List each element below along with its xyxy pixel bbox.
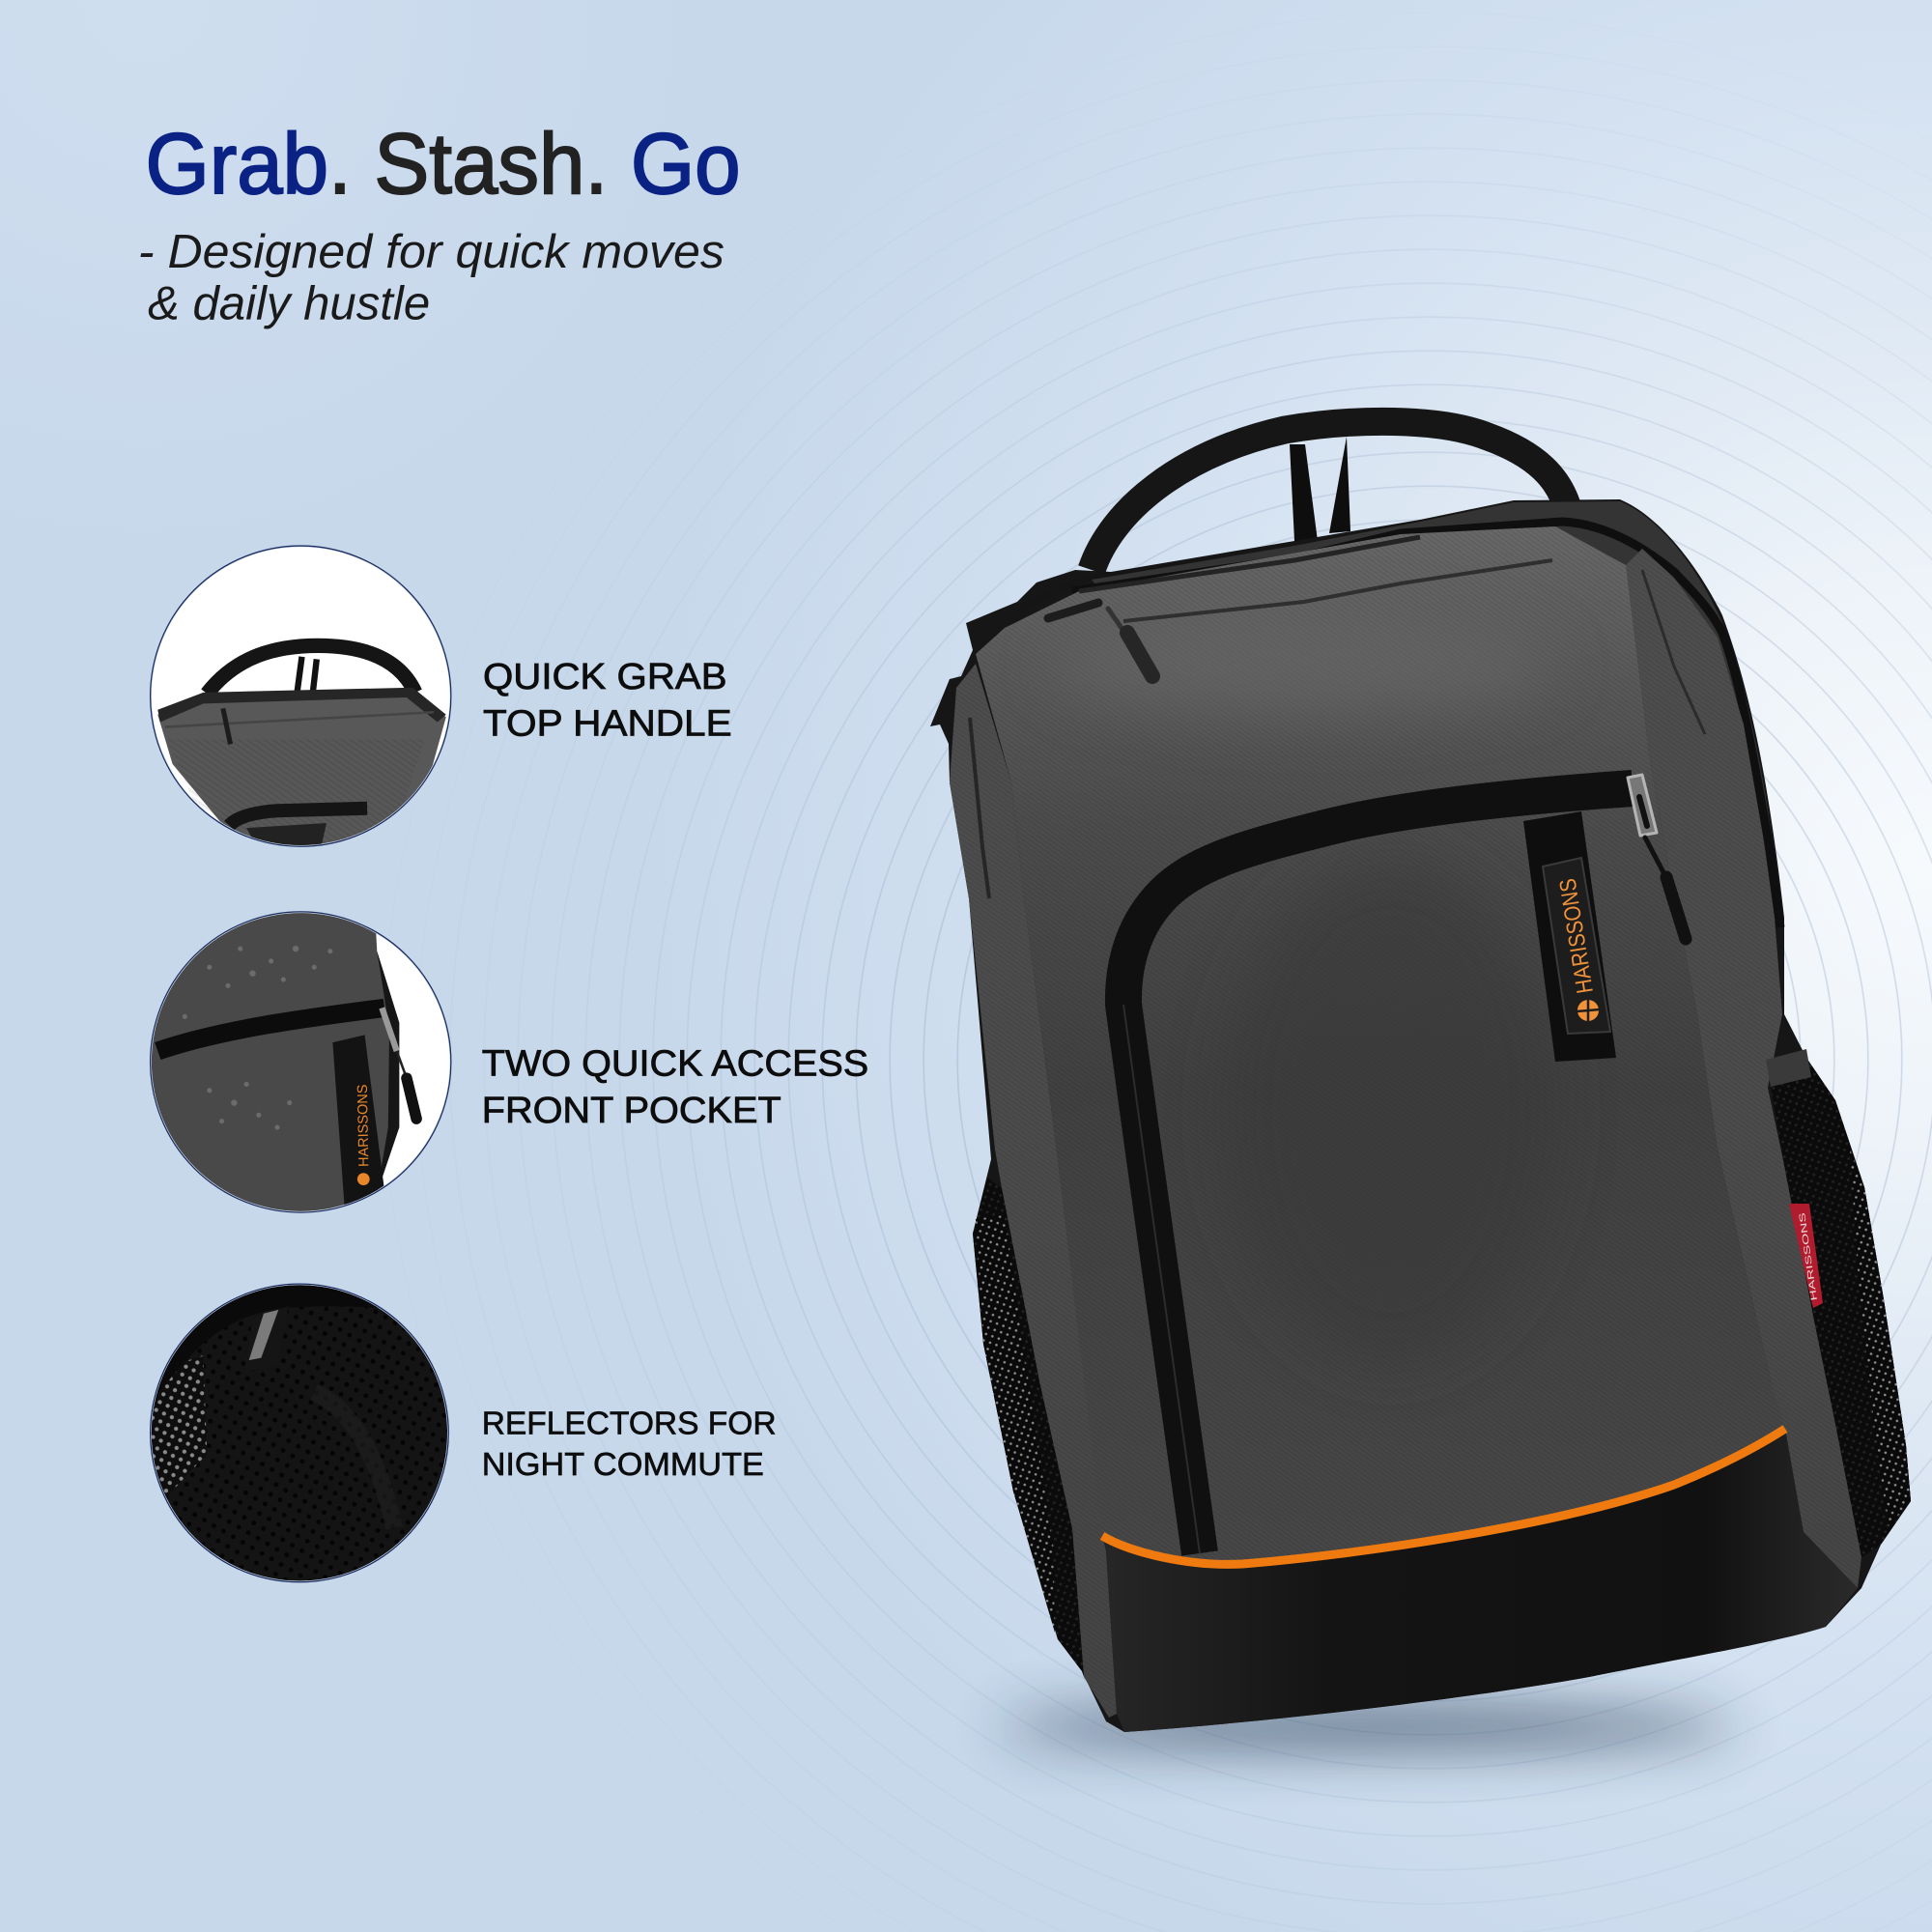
right side panel: [1626, 549, 1861, 1588]
feature: reflectors for night commute: [148, 1282, 777, 1589]
background with concentric rings: [618, 0, 1932, 1839]
feature: quick grab top handle: [148, 542, 732, 850]
circle photo: reflectors: [148, 1282, 456, 1589]
infographic artwork: [140, 129, 1911, 1789]
red side tag: [1789, 1204, 1823, 1308]
zipper band: [1072, 522, 1780, 927]
fabric shading: [1053, 618, 1555, 1362]
label: two quick access front pocket: [482, 1043, 868, 1130]
label: quick grab top handle: TOP HANDLE: [483, 702, 732, 743]
top handle: [1092, 421, 1569, 570]
brand tab: HARISSONS: [1554, 877, 1599, 995]
left mesh pocket: [973, 1178, 1084, 1677]
title: Grab. Stash. Go: [146, 115, 741, 212]
top seam: [1123, 560, 1552, 621]
orange piping: [1102, 1429, 1785, 1564]
label: reflectors for night commute: NIGHT COMMUTE: [482, 1447, 764, 1483]
front panel: [976, 526, 1785, 1564]
label: reflectors for night commute: [482, 1406, 777, 1483]
pocket zip: [1123, 788, 1633, 1553]
base: [1102, 1429, 1858, 1732]
subtitle: - Designed for quick moves: [138, 226, 724, 278]
circle photo: front pocket: [148, 906, 456, 1220]
red side tag: HARISSONS: [1797, 1212, 1819, 1301]
label: quick grab top handle: [483, 656, 732, 743]
ground shadow: [998, 1708, 1737, 1747]
backpack: [930, 421, 1911, 1732]
left side panel: [950, 664, 1117, 1718]
subtitle: [138, 226, 724, 329]
circle photo: top handle: [148, 542, 456, 850]
bag back layer: [930, 499, 1911, 1732]
pocket zipper pull: [1628, 775, 1686, 939]
label: two quick access front pocket: FRONT POCKET: [482, 1090, 781, 1130]
label: quick grab top handle: QUICK GRAB: [483, 656, 727, 696]
brand tab: [1523, 811, 1616, 1062]
subtitle: & daily hustle: [148, 277, 430, 329]
label: reflectors for night commute: REFLECTORS FOR: [482, 1406, 777, 1442]
top zip pullers: [1048, 603, 1152, 676]
feature: two quick access front pocket: [148, 906, 868, 1220]
brand label: HARISSONS: [355, 1084, 372, 1167]
right mesh pocket: [1766, 1049, 1911, 1557]
label: two quick access front pocket: TWO QUICK ACCESS: [482, 1043, 868, 1084]
top rim: [1092, 501, 1782, 927]
